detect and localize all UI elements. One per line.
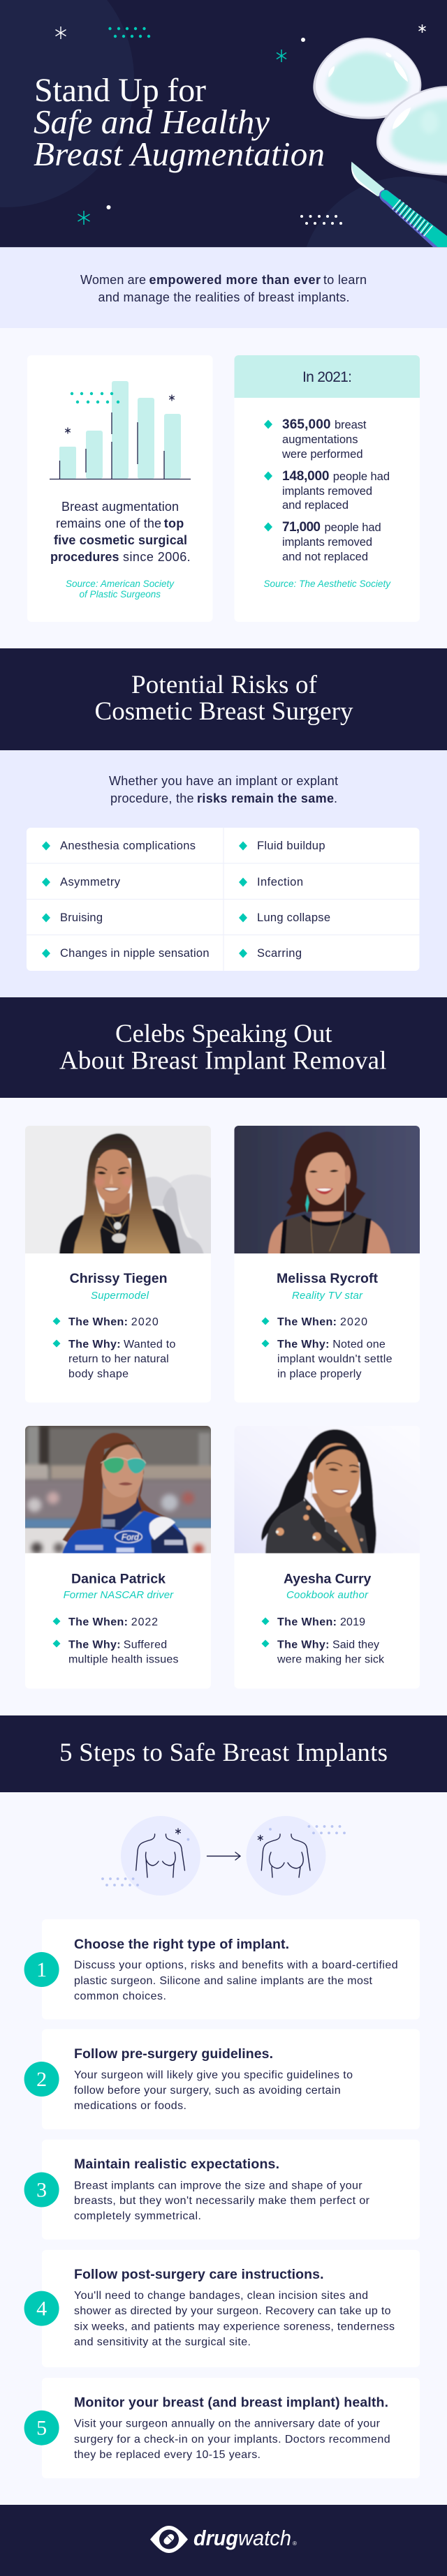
step 5: they be replaced every 10-15 years. xyxy=(74,2449,261,2461)
name: Chrissy Tiegen xyxy=(70,1271,168,1286)
logo wordmark: watch xyxy=(238,2526,291,2550)
step 4: 4 xyxy=(36,2298,47,2321)
why: return to her natural xyxy=(68,1353,169,1365)
source: of Plastic Surgeons xyxy=(80,589,161,600)
step 1: common choices. xyxy=(74,1990,166,2002)
step 5: 5 xyxy=(36,2417,47,2440)
why: The Why: xyxy=(68,1639,121,1651)
when xyxy=(261,1316,367,1328)
step 3: Maintain realistic expectations. xyxy=(74,2157,279,2172)
heading: celebs: Celebs Speaking Out xyxy=(115,1020,332,1048)
bullet: 71,000: people had xyxy=(324,521,381,534)
intro text: and manage the realities of breast implants. xyxy=(98,290,349,304)
intro text: empowered more than ever xyxy=(149,273,321,287)
risk: bruising: Bruising xyxy=(60,911,103,924)
bullet: 71,000: 71,000 xyxy=(282,520,321,535)
heading: five steps xyxy=(0,1715,447,1792)
role: Reality TV star xyxy=(292,1290,363,1302)
photo: Melissa Rycroft xyxy=(235,1126,420,1253)
risk: scarring: Scarring xyxy=(257,947,302,960)
step 3 xyxy=(24,2140,420,2240)
step 3: completely symmetrical. xyxy=(74,2210,201,2222)
intro text: Women are xyxy=(80,273,146,287)
bullet: 71,000: implants removed xyxy=(282,536,372,549)
bullet: 148,000: and replaced xyxy=(282,499,349,512)
step 1: plastic surgeon. Silicone and saline implants are the most xyxy=(74,1975,373,1987)
photo: Chrissy Tiegen xyxy=(25,1126,211,1253)
bullet: 71,000: and not replaced xyxy=(282,551,368,563)
why: body shape xyxy=(68,1368,129,1380)
why: implant wouldn't settle xyxy=(277,1353,393,1365)
bullet: 365,000: breast xyxy=(335,419,367,431)
icon: arrow xyxy=(207,1852,240,1860)
step 5: Visit your surgeon annually on the anniversary date of your xyxy=(74,2418,381,2430)
source: Source: The Aesthetic Society xyxy=(264,579,391,589)
step 5 xyxy=(24,2378,420,2478)
when: The When: xyxy=(277,1316,337,1328)
card: Ayesha Curry xyxy=(235,1429,384,1665)
role: Supermodel xyxy=(91,1290,149,1302)
title: Stand Up for xyxy=(34,72,206,109)
decoration: lower teal asterisk xyxy=(78,211,89,225)
bullet: 148,000: implants removed xyxy=(282,485,372,498)
decoration: teal asterisk xyxy=(277,50,286,62)
why xyxy=(261,1639,385,1665)
why: multiple health issues xyxy=(68,1654,179,1665)
step 4: You'll need to change bandages, clean incision sites and xyxy=(74,2290,368,2302)
source xyxy=(66,579,175,600)
decoration: lower white dot xyxy=(106,205,110,209)
risks intro text xyxy=(109,774,338,805)
bullet: 148,000: 148,000 xyxy=(282,469,330,484)
logo wordmark: drug xyxy=(193,2526,238,2550)
why: The Why: xyxy=(68,1339,121,1350)
risks intro text: procedure, the xyxy=(110,791,194,805)
risk: lung collapse: Lung collapse xyxy=(257,911,330,924)
step 2: follow before your surgery, such as avoiding certain xyxy=(74,2085,341,2097)
card text: Breast augmentation xyxy=(61,500,179,514)
risks intro text: . xyxy=(334,791,337,805)
bar chart xyxy=(50,381,191,479)
why xyxy=(53,1639,179,1665)
why: The Why: xyxy=(277,1339,329,1350)
decoration: small white asterisk xyxy=(419,24,426,33)
step 4: and sensitivity at the surgical site. xyxy=(74,2337,251,2348)
bullet: 365,000: 365,000 xyxy=(282,417,331,432)
name: Ayesha Curry xyxy=(284,1572,372,1587)
panel: statistics section xyxy=(0,328,447,648)
title: Safe and Healthy xyxy=(34,103,270,141)
bullet: 365,000: augmentations xyxy=(282,433,358,446)
icon: implant back xyxy=(313,38,421,119)
card: Danica Patrick xyxy=(25,1426,211,1665)
decoration: teal dots xyxy=(108,27,150,38)
intro text xyxy=(80,273,367,304)
why: Wanted to xyxy=(124,1339,175,1350)
card text: since 2006. xyxy=(123,550,191,564)
panel: steps section xyxy=(0,1792,447,2505)
decoration: white asterisk xyxy=(56,27,66,39)
panel: header xyxy=(0,0,447,247)
icon: drugwatch logo xyxy=(150,2526,188,2553)
step 4: six weeks, and patients may experience soreness, tenderness xyxy=(74,2321,395,2332)
when: 2020 xyxy=(340,1316,367,1328)
risks table xyxy=(27,828,419,971)
risk: asymmetry: Asymmetry xyxy=(60,876,121,888)
bullet: 365,000 xyxy=(264,417,367,461)
heading: potential risks: Potential Risks of xyxy=(131,671,318,699)
heading: potential risks xyxy=(0,648,447,750)
risks intro text: risks remain the same xyxy=(197,791,334,805)
card heading: In 2021: xyxy=(302,369,352,385)
card text: five cosmetic surgical xyxy=(54,533,187,547)
intro text: to learn xyxy=(323,273,367,287)
title xyxy=(34,72,325,173)
card text: top xyxy=(164,516,184,530)
panel: footer xyxy=(0,2505,447,2576)
why xyxy=(53,1339,175,1380)
heading: potential risks: Cosmetic Breast Surgery xyxy=(95,697,353,726)
when: The When: xyxy=(277,1616,337,1628)
risk: anesthesia complications: Anesthesia complications xyxy=(60,840,196,852)
panel: celebs section xyxy=(25,1126,420,1665)
card: in 2021 xyxy=(235,355,420,622)
step 1: 1 xyxy=(36,1958,47,1981)
bullet: 365,000: were performed xyxy=(281,448,363,461)
photo: Danica Patrick: Ford xyxy=(122,1532,139,1542)
decoration: white dot xyxy=(301,38,305,42)
when: 2020 xyxy=(131,1316,159,1328)
step 5: Monitor your breast (and breast implant) health. xyxy=(74,2395,388,2411)
step 2: medications or foods. xyxy=(74,2100,186,2112)
risk: fluid buildup: Fluid buildup xyxy=(257,840,325,852)
role: Former NASCAR driver xyxy=(64,1589,174,1601)
step 2 xyxy=(24,2030,420,2129)
step 4: Follow post-surgery care instructions. xyxy=(74,2267,324,2282)
card: Chrissy Tiegen xyxy=(25,1126,211,1380)
card text xyxy=(50,500,191,564)
photo: Ayesha Curry xyxy=(235,1426,420,1554)
step 4: shower as directed by your surgeon. Recovery can take up to xyxy=(74,2305,391,2317)
card: Melissa Rycroft xyxy=(235,1126,420,1380)
icon: implant front xyxy=(376,86,447,176)
heading: celebs xyxy=(0,997,447,1098)
icon: torso before xyxy=(136,1834,184,1877)
when xyxy=(261,1616,365,1628)
heading: celebs: About Breast Implant Removal xyxy=(59,1047,387,1075)
decoration: white dots xyxy=(300,215,342,225)
when: The When: xyxy=(68,1616,128,1628)
card text: remains one of the xyxy=(56,516,161,530)
why: The Why: xyxy=(277,1639,329,1651)
step 1: Discuss your options, risks and benefits with a board-certified xyxy=(74,1960,398,1972)
panel: risks xyxy=(0,750,447,997)
when xyxy=(53,1616,158,1628)
risk: infection: Infection xyxy=(257,876,303,888)
card text: procedures xyxy=(50,550,119,564)
card: top five procedures xyxy=(27,355,212,622)
why xyxy=(261,1339,393,1380)
step 2: Your surgeon will likely give you specific guidelines to xyxy=(74,2069,353,2081)
logo wordmark xyxy=(193,2526,297,2550)
title: Breast Augmentation xyxy=(34,135,325,173)
icon: torso after xyxy=(261,1834,310,1877)
bullet: 71,000 xyxy=(264,520,381,563)
name: Danica Patrick xyxy=(71,1572,166,1587)
heading: five steps: 5 Steps to Safe Breast Implants xyxy=(59,1739,388,1767)
risk: changes in nipple sensation: Changes in nipple sensation xyxy=(60,947,210,960)
bullet: 148,000: people had xyxy=(333,470,390,483)
name: Melissa Rycroft xyxy=(277,1271,379,1286)
why: Suffered xyxy=(124,1639,167,1651)
why: were making her sick xyxy=(277,1654,385,1665)
photo: Danica Patrick xyxy=(25,1426,211,1554)
logo wordmark: ® xyxy=(293,2540,297,2547)
when: 2019 xyxy=(340,1616,365,1628)
step 3: 3 xyxy=(36,2179,47,2201)
step 3: Breast implants can improve the size and shape of your xyxy=(74,2180,362,2191)
when: 2022 xyxy=(131,1616,158,1628)
step 2: 2 xyxy=(36,2068,47,2091)
why: Noted one xyxy=(332,1339,386,1350)
when xyxy=(53,1316,159,1328)
step 2: Follow pre-surgery guidelines. xyxy=(74,2046,273,2062)
icon: scalpel xyxy=(351,162,447,251)
step 1 xyxy=(24,1919,420,2020)
why: Said they xyxy=(332,1639,379,1651)
role: Cookbook author xyxy=(286,1589,369,1601)
bullet: 148,000 xyxy=(264,469,390,512)
step 4 xyxy=(24,2250,420,2367)
step 3: breasts, but they won't necessarily make them perfect or xyxy=(74,2195,370,2207)
illustration: before and after xyxy=(101,1816,346,1896)
step 1: Choose the right type of implant. xyxy=(74,1937,289,1952)
risks intro text: Whether you have an implant or explant xyxy=(109,774,338,788)
step 5: surgery for a check-in on your implants. Doctors recommend xyxy=(74,2434,390,2445)
why: in place properly xyxy=(277,1368,362,1380)
when: The When: xyxy=(68,1316,128,1328)
source: Source: American Society xyxy=(66,579,175,589)
panel: intro xyxy=(0,247,447,328)
